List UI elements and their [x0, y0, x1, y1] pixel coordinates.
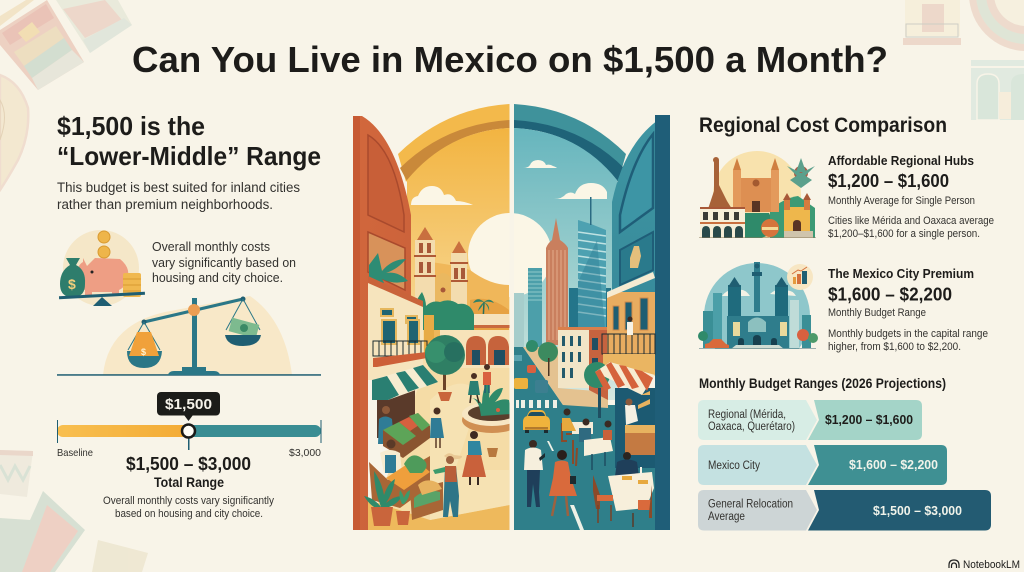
- tree: [425, 335, 465, 401]
- bar: regional: $1,200 – $1,600: [825, 412, 913, 427]
- cars: [514, 355, 548, 393]
- bar: mexico city: [698, 445, 947, 485]
- door: left panels: [368, 135, 404, 232]
- icon: potted plant: [364, 471, 410, 526]
- sun: left: [468, 213, 510, 297]
- ground: [378, 368, 510, 520]
- slider knob: [182, 424, 195, 438]
- slider end labels: [57, 447, 321, 459]
- logo: NotebookLM: NotebookLM: [963, 559, 1020, 571]
- icon: piggy bank on seesaw: [59, 230, 145, 306]
- decorative arches right: [971, 60, 1024, 120]
- central illustration: traditional and modern Mexico: [353, 100, 670, 532]
- text: mexico city premium: $1,600 – $2,200: [828, 284, 952, 304]
- clouds: right: [523, 160, 557, 168]
- restaurant: [584, 362, 655, 468]
- decorative sombrero left edge: [0, 75, 28, 190]
- vendor two: [386, 440, 396, 448]
- decorative medallion top right: [969, 0, 1024, 51]
- left building: [368, 276, 434, 380]
- icon: mexico city: [698, 262, 818, 369]
- bar: mexico city: $1,600 – $2,200: [849, 457, 938, 472]
- stat: total range: based on housing and city choice.: [115, 508, 263, 520]
- right building: [602, 272, 655, 376]
- slider: total range: [57, 392, 322, 459]
- side note: Overall monthly costs: [152, 240, 270, 254]
- banana plant: [369, 253, 408, 284]
- bar: regional: [698, 400, 922, 440]
- bar: regional: Regional (Mérida,: [708, 409, 786, 421]
- slider end labels: $3,000: [289, 447, 321, 459]
- side note: [152, 240, 296, 285]
- left half: colonial town: [353, 104, 510, 530]
- heading: monthly budget ranges: Monthly Budget Ranges (2026 Projections): [699, 376, 946, 391]
- icon: piggy bank on seesaw: $: [68, 276, 76, 292]
- text: affordable regional hubs: [828, 154, 994, 240]
- text: affordable regional hubs: Cities like Mérida and Oaxaca average: [828, 215, 994, 227]
- right half: modern city: [514, 104, 670, 530]
- panel: monthly budget ranges: [698, 376, 991, 530]
- text: affordable regional hubs: Affordable Regional Hubs: [828, 154, 974, 168]
- palm: [483, 302, 484, 322]
- heading: lower-middle range: “Lower-Middle” Range: [57, 141, 321, 171]
- cafe tables: [562, 408, 654, 527]
- heading: regional cost comparison: Regional Cost Comparison: [699, 114, 947, 137]
- text: affordable regional hubs: $1,200 – $1,600: [828, 171, 949, 191]
- sun: right: [514, 213, 550, 294]
- heading: lower-middle range: $1,500 is the: [57, 111, 205, 141]
- crosswalk: [516, 400, 557, 408]
- intro text: [57, 180, 300, 212]
- bar: general relocation average: Average: [708, 511, 745, 523]
- icon: balance scale: [57, 296, 321, 376]
- clouds: left: [411, 186, 473, 205]
- back building with arches: [440, 314, 510, 370]
- panel: regional cost comparison: [698, 114, 994, 369]
- stat: total range: $1,500 – $3,000: [126, 454, 251, 474]
- street: [514, 347, 655, 530]
- side note: vary significantly based on: [152, 256, 296, 270]
- sky: right: [514, 128, 617, 400]
- bar: general relocation average: $1,500 – $3,000: [873, 503, 962, 518]
- taxi: [523, 410, 550, 433]
- icon: balance scale: $: [141, 347, 146, 357]
- arch: left: [398, 104, 510, 182]
- decorative textiles bottom left: [0, 450, 148, 572]
- tooltip: $1,500: [157, 392, 220, 421]
- lower crate: [369, 456, 430, 508]
- title: Can You Live in Mexico on $1,500 a Month?: [132, 39, 888, 80]
- text: mexico city premium: The Mexico City Premium: [828, 267, 974, 281]
- side note: housing and city choice.: [152, 271, 283, 285]
- icon: chart badge: [787, 264, 813, 290]
- market stall: [369, 365, 443, 520]
- panel: lower-middle range: [57, 111, 322, 520]
- door: left: [360, 116, 411, 530]
- brick building: [558, 327, 608, 400]
- text: affordable regional hubs: Monthly Average for Single Person: [828, 195, 975, 207]
- door: right: [612, 122, 655, 292]
- heading: lower-middle range: [57, 111, 321, 171]
- stat: total range: Overall monthly costs vary significantly: [103, 495, 274, 507]
- upper crate: [383, 413, 430, 458]
- text: mexico city premium: higher, from $1,600 to $2,200.: [828, 341, 961, 353]
- decorative building top right: [903, 0, 961, 45]
- church: [414, 227, 468, 306]
- text: mexico city premium: Monthly Budget Range: [828, 307, 926, 319]
- shrubs: [412, 292, 474, 330]
- street trees: [526, 340, 558, 376]
- stat: total range: [103, 454, 274, 520]
- slider end labels: Baseline: [57, 447, 93, 459]
- bar: regional: Oaxaca, Querétaro): [708, 421, 795, 433]
- tooltip: $1,500: $1,500: [165, 396, 212, 413]
- stat: total range: Total Range: [154, 474, 224, 490]
- sky: left: [407, 128, 510, 400]
- bar: general relocation average: General Relocation: [708, 498, 793, 510]
- text: mexico city premium: Monthly budgets in the capital range: [828, 328, 988, 340]
- text: mexico city premium: [828, 267, 988, 353]
- icon: regional hubs: [699, 151, 816, 239]
- intro text: rather than premium neighborhoods.: [57, 197, 273, 212]
- skyline: [514, 197, 611, 353]
- planter: [462, 385, 510, 433]
- people: plaza: [430, 364, 498, 517]
- intro text: This budget is best suited for inland cities: [57, 180, 300, 195]
- people: street: [524, 440, 584, 530]
- text: affordable regional hubs: $1,200–$1,600 for a single person.: [828, 228, 980, 240]
- bar: mexico city: Mexico City: [708, 460, 760, 472]
- hills: [430, 262, 509, 340]
- vendor: [382, 406, 390, 414]
- bar: general relocation average: [698, 490, 991, 530]
- arch: right: [514, 104, 626, 182]
- decorative textiles top left: [0, 0, 132, 90]
- divider: [510, 100, 514, 532]
